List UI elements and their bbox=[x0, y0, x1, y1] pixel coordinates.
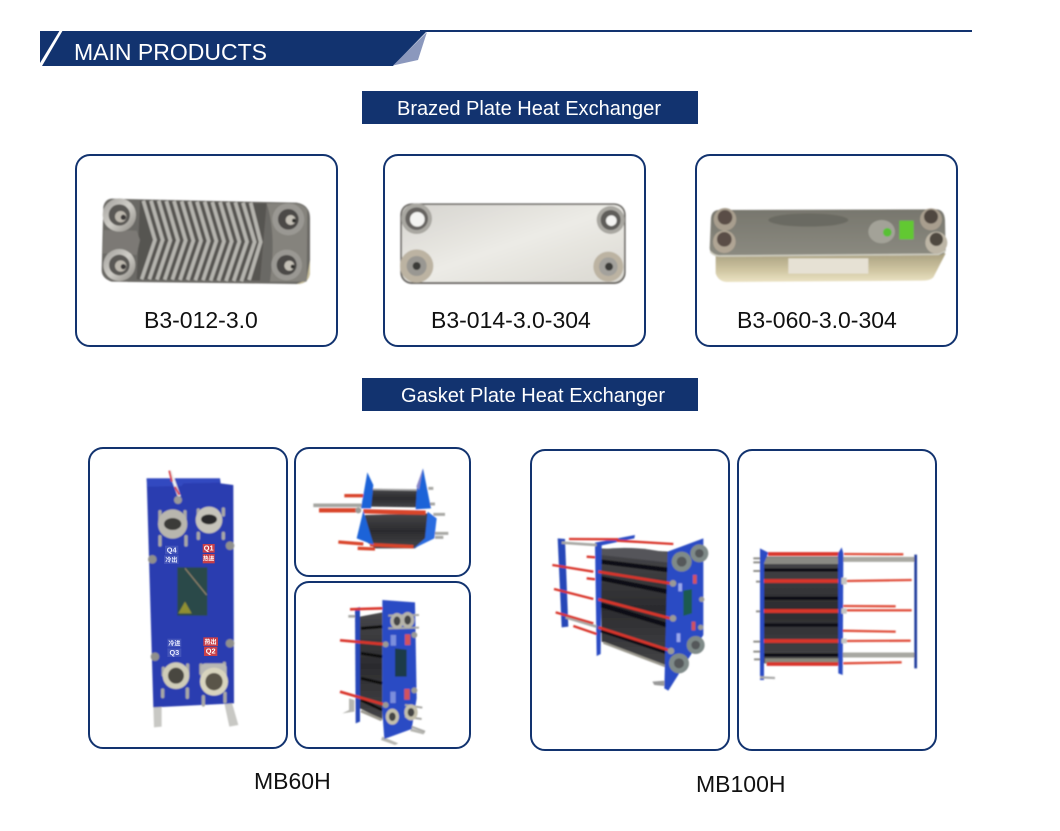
panel: B3-060-3.0-304 bbox=[696, 155, 957, 346]
panel: B3-012-3.0 bbox=[76, 155, 337, 346]
caption: B3-014-3.0-304 bbox=[431, 307, 591, 333]
header banner bbox=[40, 30, 972, 66]
caption: B3-012-3.0 bbox=[144, 307, 258, 333]
product photo: corrugated plate bbox=[102, 198, 310, 284]
panel: MB60H side view bbox=[295, 448, 470, 576]
port labels: Q2 bbox=[206, 647, 216, 656]
port labels: Q3 bbox=[169, 648, 179, 657]
port labels: 冷进 bbox=[168, 639, 180, 647]
caption: MB100H: MB100H bbox=[696, 771, 785, 797]
panel: B3-014-3.0-304 bbox=[384, 155, 645, 346]
port labels: 冷出 bbox=[165, 556, 177, 564]
port labels: 热进 bbox=[203, 555, 215, 563]
port labels bbox=[164, 544, 218, 657]
product photo: large angled unit bbox=[552, 535, 708, 691]
panel: MB60H front view bbox=[89, 448, 287, 748]
port labels: Q4 bbox=[167, 545, 177, 554]
section heading: brazed bbox=[362, 91, 698, 124]
panel: MB100H angled view bbox=[531, 450, 729, 750]
panel: MB100H side view bbox=[738, 450, 936, 750]
panel: MB60H angled view bbox=[295, 582, 470, 748]
product photo: blue front plate bbox=[147, 471, 238, 727]
product photo: open frame side bbox=[313, 468, 448, 549]
caption: MB60H: MB60H bbox=[254, 768, 331, 794]
product photo: stacked plate bbox=[710, 208, 947, 282]
port labels: 热出 bbox=[205, 638, 217, 646]
caption: B3-060-3.0-304 bbox=[737, 307, 897, 333]
section heading: brazed: Brazed Plate Heat Exchanger bbox=[397, 98, 661, 120]
section heading: gasket bbox=[362, 378, 698, 411]
product photo: side elevation bbox=[753, 547, 917, 680]
port labels: Q1 bbox=[204, 544, 214, 553]
product photo: flat plate bbox=[400, 203, 626, 284]
product photo: angled unit bbox=[340, 600, 425, 745]
heading: main products: MAIN PRODUCTS bbox=[74, 39, 267, 65]
section heading: gasket: Gasket Plate Heat Exchanger bbox=[401, 385, 665, 407]
